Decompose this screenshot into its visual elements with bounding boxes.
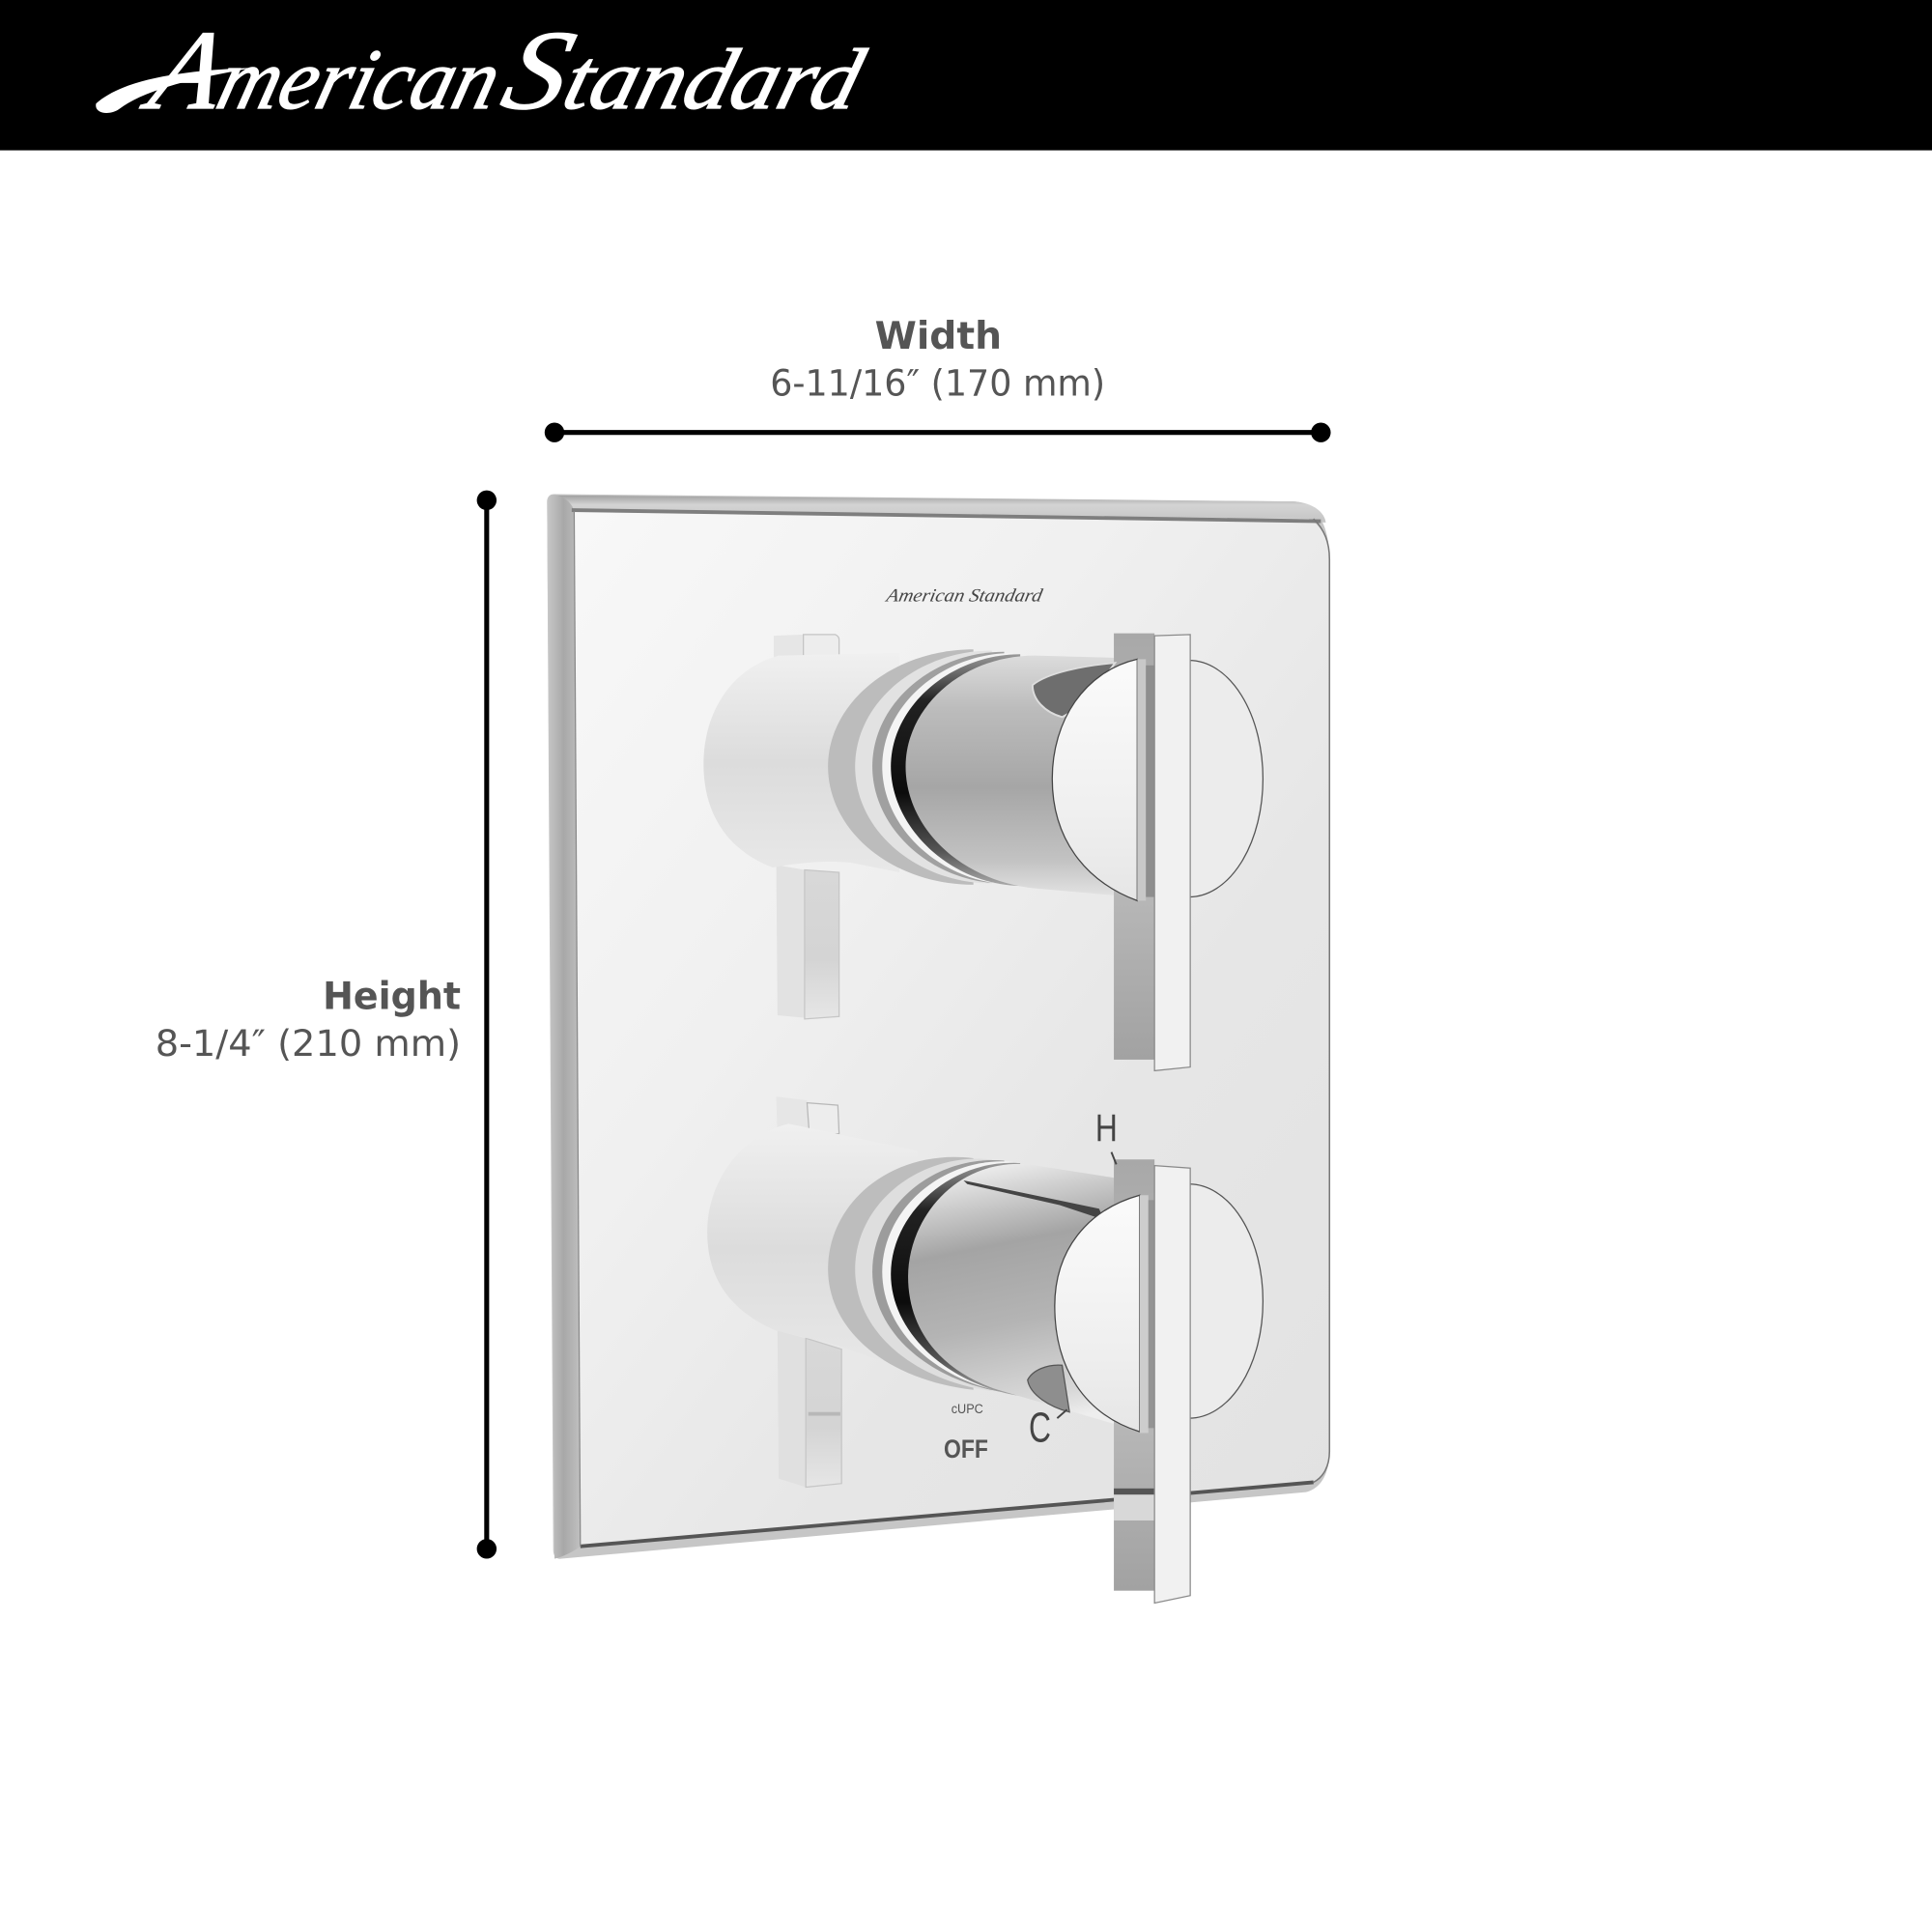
top handle cap strip	[1137, 659, 1154, 900]
header band	[0, 0, 1932, 151]
top handle rear stub	[774, 635, 839, 668]
bottom handle rear stub	[777, 1096, 839, 1140]
top handle collar rings	[828, 649, 1020, 886]
bottom handle cap strip	[1140, 1195, 1154, 1433]
brand logo: Standard	[491, 8, 880, 133]
cUPC marking: cUPC	[952, 1402, 983, 1416]
height label: 8-1/4″ (210 mm)	[156, 1023, 461, 1065]
top handle rear cylinder	[703, 653, 899, 872]
top handle lever front face	[1154, 635, 1190, 1070]
bottom handle reflection	[963, 1180, 1104, 1220]
bottom handle	[707, 1096, 1263, 1603]
bottom handle rear cylinder	[707, 1123, 918, 1374]
top handle	[703, 634, 1263, 1070]
top handle main cylinder	[906, 656, 1120, 895]
bottom handle collar rings	[828, 1157, 1020, 1396]
bottom handle rear lever	[778, 1331, 841, 1488]
plate logo: American Standard	[883, 586, 1044, 606]
hot marking	[1095, 1107, 1118, 1164]
width dimension line	[545, 423, 1331, 442]
hot marking: H	[1095, 1107, 1118, 1150]
width label: 6-11/16″ (170 mm)	[770, 362, 1105, 404]
bottom handle lever rear face	[1114, 1159, 1154, 1591]
width label	[770, 314, 1105, 404]
bottom handle escutcheon disc	[1115, 1184, 1263, 1418]
trim plate	[547, 494, 1329, 1559]
off marking: OFF	[944, 1435, 988, 1463]
top handle rear lever	[777, 865, 839, 1019]
top handle escutcheon disc	[1115, 661, 1263, 897]
cold marking: C	[1029, 1405, 1051, 1451]
bottom handle cap	[1055, 1195, 1140, 1432]
height label: Height	[323, 975, 461, 1019]
top handle cap	[1052, 659, 1137, 900]
bottom handle main cylinder	[908, 1164, 1120, 1426]
bottom handle lever front face	[1154, 1166, 1190, 1603]
brand logo	[96, 8, 880, 133]
width label: Width	[875, 314, 1002, 358]
top handle lever rear face	[1114, 634, 1154, 1060]
brand logo: American	[132, 8, 518, 133]
top handle dimple	[1033, 663, 1115, 717]
height dimension line	[477, 491, 497, 1559]
height label	[156, 975, 461, 1065]
bottom handle dimple	[1028, 1365, 1069, 1412]
